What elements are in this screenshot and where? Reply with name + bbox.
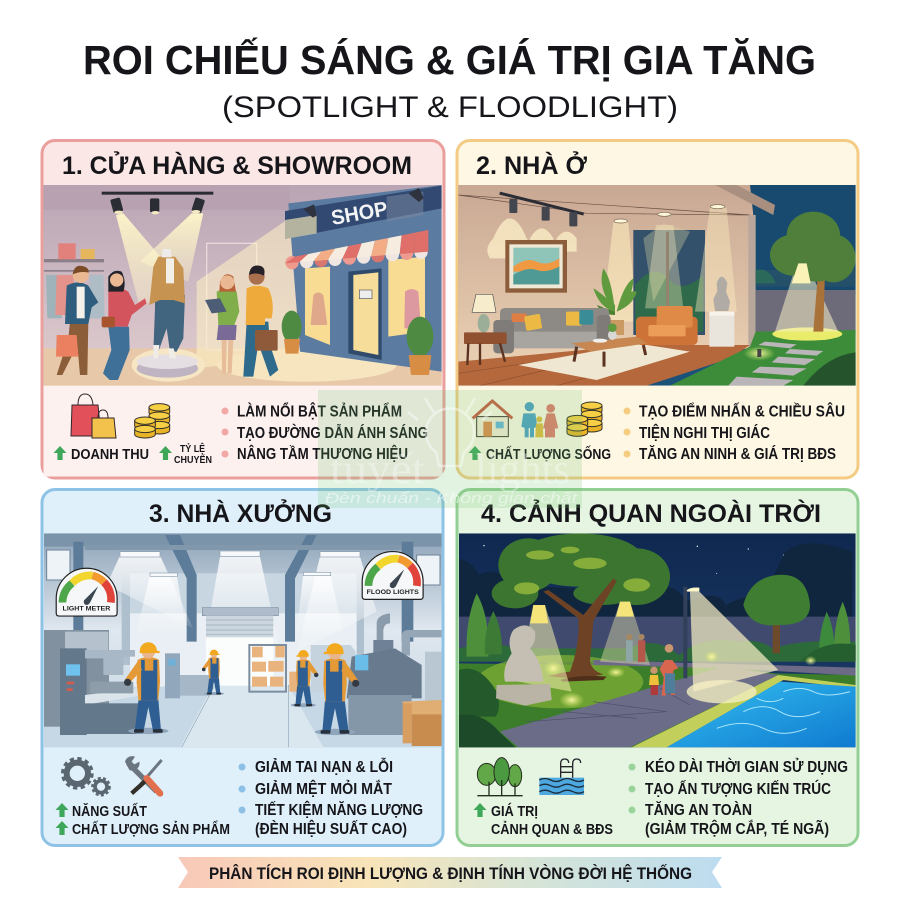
shelf with boxes [249, 645, 286, 692]
panel 3 frame [42, 490, 443, 846]
panel 2 heading: 2. NHÀ Ở [476, 150, 588, 180]
bullet list: TĂNG AN TOÀN [645, 802, 752, 819]
bullet list [624, 403, 845, 463]
icon: pool ladder [539, 759, 584, 795]
watermark [318, 390, 582, 508]
people [57, 322, 88, 375]
garden [756, 270, 856, 287]
gauges: LIGHT METER [62, 606, 110, 613]
floor [458, 345, 750, 386]
bullet list: TIỆN NGHI THỊ GIÁC [639, 424, 770, 442]
window [633, 230, 705, 335]
cypress trees [466, 593, 489, 657]
panel 1: cửa hàng & showroom [42, 140, 444, 478]
panel 2: nhà ở [457, 140, 858, 478]
subtitle: (SPOTLIGHT & FLOODLIGHT) [222, 91, 678, 124]
bullet list: TẠO ẤN TƯỢNG KIẾN TRÚC [645, 780, 831, 798]
bullet list [628, 758, 848, 838]
coffee table [572, 337, 647, 352]
bullet list: TĂNG AN NINH & GIÁ TRỊ BĐS [639, 446, 836, 463]
watermark: tuyết [330, 447, 425, 493]
icon: coins [567, 402, 602, 436]
label: giá trị cảnh quan & bđs: GIÁ TRỊ [491, 803, 538, 820]
bushes [459, 669, 499, 717]
bullet list: TẠO ĐIỂM NHẤN & CHIỀU SÂU [639, 403, 845, 421]
bullet list: GIẢM MỆT MỎI MẮT [255, 780, 392, 798]
label: giá trị cảnh quan & bđs: CẢNH QUAN & BĐS [491, 821, 613, 838]
icon: trees [477, 758, 523, 796]
far treeline [459, 543, 852, 618]
sofa [500, 308, 609, 335]
label: năng suất: NĂNG SUẤT [72, 803, 147, 820]
bullet list: KÉO DÀI THỜI GIAN SỬ DỤNG [645, 758, 848, 776]
planters [282, 311, 302, 343]
panel 1 illustration: shop: SHOP [330, 197, 390, 230]
label: doanh thu: DOANH THU [71, 447, 149, 463]
label: chất lượng sản phẩm: CHẤT LƯỢNG SẢN PHẨM [72, 820, 230, 838]
ground lights [559, 692, 584, 708]
gauges [56, 568, 117, 616]
arrow: năng suất up [56, 803, 68, 817]
right tree [773, 622, 780, 653]
panel 4 frame [457, 490, 858, 846]
arrow: quality of life up [468, 446, 482, 460]
roller door [202, 608, 278, 616]
bullet list: GIẢM TAI NẠN & LỖI [255, 758, 393, 776]
lamp and side table [472, 294, 496, 312]
footer banner [178, 857, 722, 888]
watermark: lights [475, 447, 570, 493]
right machine [377, 613, 390, 642]
footer banner: PHÂN TÍCH ROI ĐỊNH LƯỢNG & ĐỊNH TÍNH VÒNG ĐỜI HỆ THỐNG [209, 863, 692, 883]
back machines [165, 653, 180, 698]
stone lion statue [496, 684, 552, 706]
arrow: conversion up [159, 446, 172, 460]
bullet list: (ĐÈN HIỆU SUẤT CAO) [255, 820, 407, 838]
armchair [636, 317, 698, 345]
panel 3 illustration: factory [44, 533, 442, 748]
left machine [44, 630, 109, 727]
bullet list: TẠO ĐƯỜNG DẪN ÁNH SÁNG [237, 424, 428, 442]
spotlight beams [518, 605, 572, 692]
shop front [288, 185, 442, 372]
label: giá trị cảnh quan & bđs [491, 803, 613, 838]
label: tỷ lệ chuyển: TỶ LỆ [180, 442, 205, 455]
icon: wrench and screwdriver [125, 756, 162, 793]
icon: family [521, 402, 558, 437]
garden wall [459, 617, 856, 662]
panel 3 heading: 3. NHÀ XƯỞNG [149, 498, 332, 528]
trusses [73, 535, 413, 665]
people on path [660, 644, 678, 696]
panel 4: cảnh quan ngoài trời [457, 490, 858, 846]
bullet list [238, 758, 423, 838]
grass and path [459, 663, 856, 747]
panel 1 heading: 1. CỬA HÀNG & SHOWROOM [62, 150, 412, 180]
icon: coins [135, 404, 170, 438]
label: tỷ lệ chuyển: CHUYỂN [174, 453, 212, 466]
bullet list: TIẾT KIỆM NĂNG LƯỢNG [255, 801, 423, 819]
bullet list: (GIẢM TRỘM CẮP, TÉ NGÃ) [645, 820, 829, 838]
painting [505, 240, 567, 293]
light fixtures and beams [107, 556, 193, 628]
plant [593, 268, 637, 315]
arrow: doanh thu up [54, 446, 66, 460]
panel 1 frame [42, 140, 444, 478]
bullet list: LÀM NỔI BẬT SẢN PHẨM [237, 403, 402, 421]
big tree [492, 533, 670, 608]
lamp post [683, 587, 687, 678]
panel 4 heading: 4. CẢNH QUAN NGOÀI TRỜI [481, 498, 821, 528]
arrow: giá trị up [474, 803, 486, 817]
panel 3 illustration: factory: FLOOD LIGHTS [367, 589, 419, 596]
bullet list: NÂNG TẦM THƯƠNG HIỆU [237, 445, 408, 463]
label: tỷ lệ chuyển [174, 442, 212, 466]
icon: house [473, 401, 512, 437]
icon: gears [63, 759, 110, 795]
watermark: Đèn chuẩn - Không gian chất [325, 490, 578, 507]
panel 1 lower background [44, 386, 442, 476]
label: chất lượng sống: CHẤT LƯỢNG SỐNG [486, 445, 611, 463]
mannequin on plinth [136, 364, 198, 378]
panel 2 frame [457, 140, 858, 478]
sculpture [709, 312, 734, 347]
icon: shopping bags [71, 394, 116, 438]
panel 2 illustration: living room [458, 185, 856, 386]
awning [285, 230, 428, 269]
panel 4 illustration: garden at night [459, 533, 857, 747]
arrow: chất lượng up [56, 821, 68, 835]
panel 3: nhà xưởng [42, 490, 443, 846]
panel 1 illustration: shop [43, 185, 442, 386]
title: ROI CHIẾU SÁNG & GIÁ TRỊ GIA TĂNG [83, 37, 816, 83]
bullet list [222, 403, 428, 463]
